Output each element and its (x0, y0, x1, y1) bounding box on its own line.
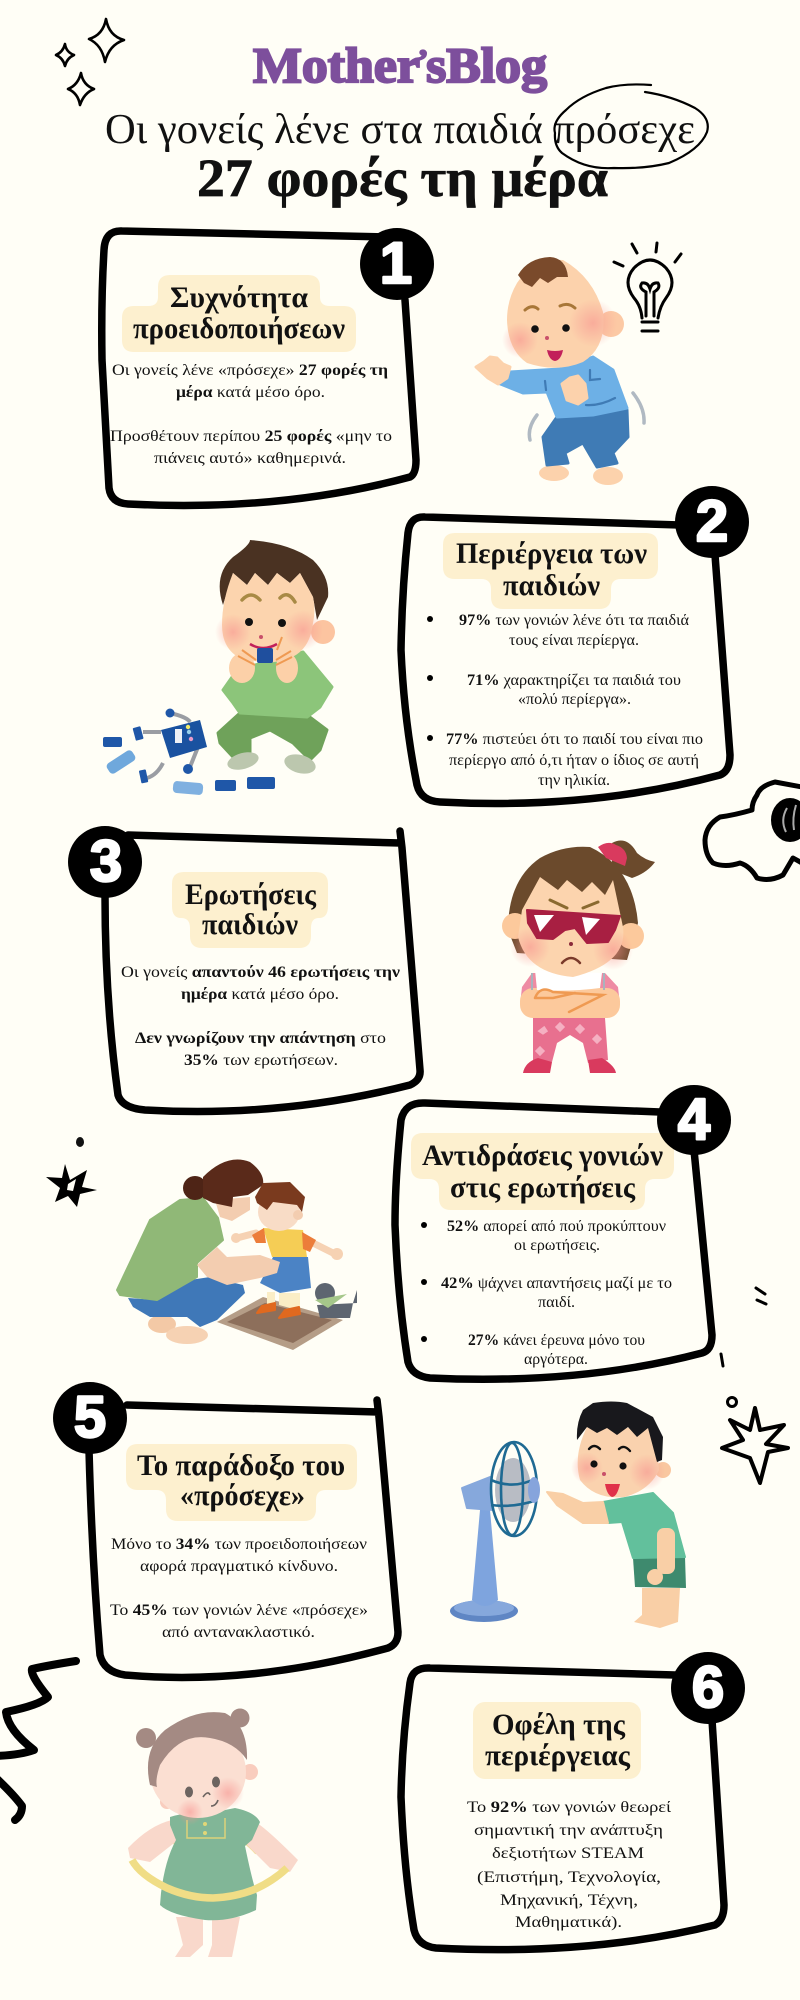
panel 2 number badge: 2 (696, 489, 728, 554)
panel 2 frame (401, 517, 730, 803)
panel 4 bullet list (421, 1218, 672, 1368)
panel 2 bullet list: 97% των γονιών λένε ότι τα παιδιά (459, 612, 689, 629)
panel 4 bullet list: 52% απορεί από πού προκύπτουν (447, 1218, 666, 1235)
illustration: girl with sunglasses and crossed arms (502, 841, 655, 1073)
panel 5 number badge: 5 (74, 1385, 106, 1450)
decoration: sparkles (56, 19, 124, 105)
panel 3 heading: παιδιών (202, 908, 299, 941)
panel 3 number badge: 3 (90, 829, 122, 894)
panel 3 heading (172, 872, 328, 948)
panel 2 bullet list: περίεργο από ό,τι ήταν ο ίδιος σε αυτή (449, 752, 699, 769)
panel 4 bullet list: 42% ψάχνει απαντήσεις μαζί με το (441, 1275, 672, 1292)
panel 2: children's curiosity (401, 486, 749, 803)
panel 1: warning frequency (102, 228, 434, 505)
panel 5: the paradox of watch out (53, 1382, 398, 1677)
decoration: left squiggle (0, 1661, 76, 1820)
panel 6 body text (467, 1799, 672, 1931)
panel 6 body text: (Επιστήμη, Τεχνολογία, (477, 1869, 661, 1886)
panel 1 heading: προειδοποιήσεων (133, 312, 346, 345)
panel 6 heading: περιέργειας (485, 1739, 630, 1772)
panel 5 number badge (53, 1382, 127, 1454)
panel 6 number badge: 6 (692, 1655, 724, 1720)
panel 3 number badge (68, 826, 142, 898)
robot parts (103, 708, 275, 795)
illustration: boy pointing at fan (450, 1402, 686, 1628)
panel 3 body text: 35% των ερωτήσεων. (184, 1052, 338, 1069)
panel 2 bullet list: 77% πιστεύει ότι το παιδί του είναι πιο (446, 731, 703, 748)
title (105, 107, 695, 208)
illustration: boy chewing toy with robot parts (103, 540, 335, 795)
panel 5 body text: από αντανακλαστικό. (162, 1624, 315, 1641)
panel 6 body text: Μηχανική, Τέχνη, (500, 1892, 638, 1909)
panel 3 heading: Ερωτήσεις (185, 878, 316, 911)
panel 1 body text: μέρα κατά μέσο όρο. (176, 384, 325, 401)
panel 5 heading: Το παράδοξο του (137, 1449, 345, 1482)
panel 3 frame (105, 831, 420, 1112)
panel 2 bullet list: την ηλικία. (538, 772, 610, 789)
panel 2 bullet list: 71% χαρακτηρίζει τα παιδιά του (467, 672, 681, 689)
panel 1 heading (122, 275, 356, 352)
panel 1 number badge (360, 228, 434, 300)
panel 6 body text: δεξιοτήτων STEAM (492, 1845, 644, 1862)
panel 4 heading: στις ερωτήσεις (450, 1171, 635, 1204)
panel 6 body text: Μαθηματικά). (515, 1914, 622, 1931)
panel 4 bullet list: αργότερα. (524, 1351, 588, 1368)
illustration: mother with toddler and puppy (117, 1160, 357, 1350)
panel 2 heading: παιδιών (503, 569, 601, 602)
illustration: girl with hoop (128, 1708, 298, 1957)
panel 4: parents' reactions (395, 1085, 731, 1379)
panel 1 number badge: 1 (380, 231, 412, 296)
icon: lightbulb (614, 243, 681, 331)
panel 6: benefits of curiosity (401, 1652, 745, 1950)
panel 4 number badge: 4 (678, 1087, 710, 1152)
logo: MothersBlog: Mother (253, 37, 414, 93)
panel 6 body text: σημαντική την ανάπτυξη (474, 1822, 663, 1839)
panel 3 body text: Οι γονείς απαντούν 46 ερωτήσεις την (121, 964, 400, 981)
panel 5 heading: «πρόσεχε» (180, 1479, 305, 1512)
logo: MothersBlog: ’ (418, 44, 428, 77)
decoration: star and dot right (722, 1398, 788, 1483)
panel 6 heading: Οφέλη της (492, 1708, 625, 1741)
panel 6 number badge (671, 1652, 745, 1724)
illustration: baby standing (476, 257, 644, 485)
panel 1 body text: Οι γονείς λένε «πρόσεχε» 27 φορές τη (112, 362, 388, 379)
panel 2 heading (443, 533, 658, 609)
logo: MothersBlog (253, 37, 547, 93)
panel 5 body text: Το 45% των γονιών λένε «πρόσεχε» (110, 1602, 368, 1619)
panel 5 body text: Μόνο το 34% των προειδοποιήσεων (111, 1536, 367, 1553)
panel 1 body text: Προσθέτουν περίπου 25 φορές «μην το (110, 428, 392, 445)
panel 6 frame (401, 1668, 724, 1950)
panel 4 heading: Αντιδράσεις γονιών (422, 1139, 664, 1172)
panel 6 heading (473, 1702, 641, 1779)
panel 2 bullet list: «πολύ περίεργα». (518, 691, 631, 708)
panel 4 heading background (411, 1133, 674, 1210)
panel 1 body text: πιάνεις αυτό» καθημερινά. (154, 450, 346, 467)
title: 27 φορές τη μέρα (197, 148, 608, 208)
panel 4 bullet list: οι ερωτήσεις. (514, 1237, 600, 1254)
panel 2 bullet list: τους είναι περίεργα. (509, 632, 639, 649)
decoration: scribbled flower (705, 782, 800, 879)
panel 1 heading: Συχνότητα (170, 281, 308, 314)
panel 4 bullet list: παιδί. (538, 1294, 575, 1311)
decoration: right ink marks (721, 1288, 766, 1366)
panel 3 body text: Δεν γνωρίζουν την απάντηση στο (135, 1030, 386, 1047)
title: Οι γονείς λένε στα παιδιά πρόσεχε (105, 107, 695, 153)
logo: MothersBlog: sBlog (426, 37, 547, 93)
panel 5 heading (126, 1444, 357, 1521)
panel 2 bullet list (427, 612, 703, 789)
hand-drawn circle around word (554, 84, 708, 168)
panel 4 number badge (657, 1085, 731, 1155)
panel 3: children's questions (68, 826, 420, 1112)
panel 5 frame (89, 1400, 398, 1677)
panel 1 frame (102, 231, 416, 505)
panel 6 body text: Το 92% των γονιών θεωρεί (467, 1799, 672, 1816)
panel 1 body text (110, 362, 392, 467)
panel 3 body text: ημέρα κατά μέσο όρο. (181, 986, 339, 1003)
panel 4 heading (422, 1139, 664, 1204)
panel 4 bullet list: 27% κάνει έρευνα μόνο του (468, 1332, 645, 1349)
panel 2 heading: Περιέργεια των (456, 537, 648, 570)
panel 5 body text: αφορά πραγματικό κίνδυνο. (140, 1558, 338, 1575)
decoration: star and dot left (46, 1137, 97, 1207)
panel 2 number badge (675, 486, 749, 558)
panel 5 body text (110, 1536, 368, 1641)
panel 4 frame (395, 1103, 712, 1379)
panel 3 body text (121, 964, 400, 1069)
